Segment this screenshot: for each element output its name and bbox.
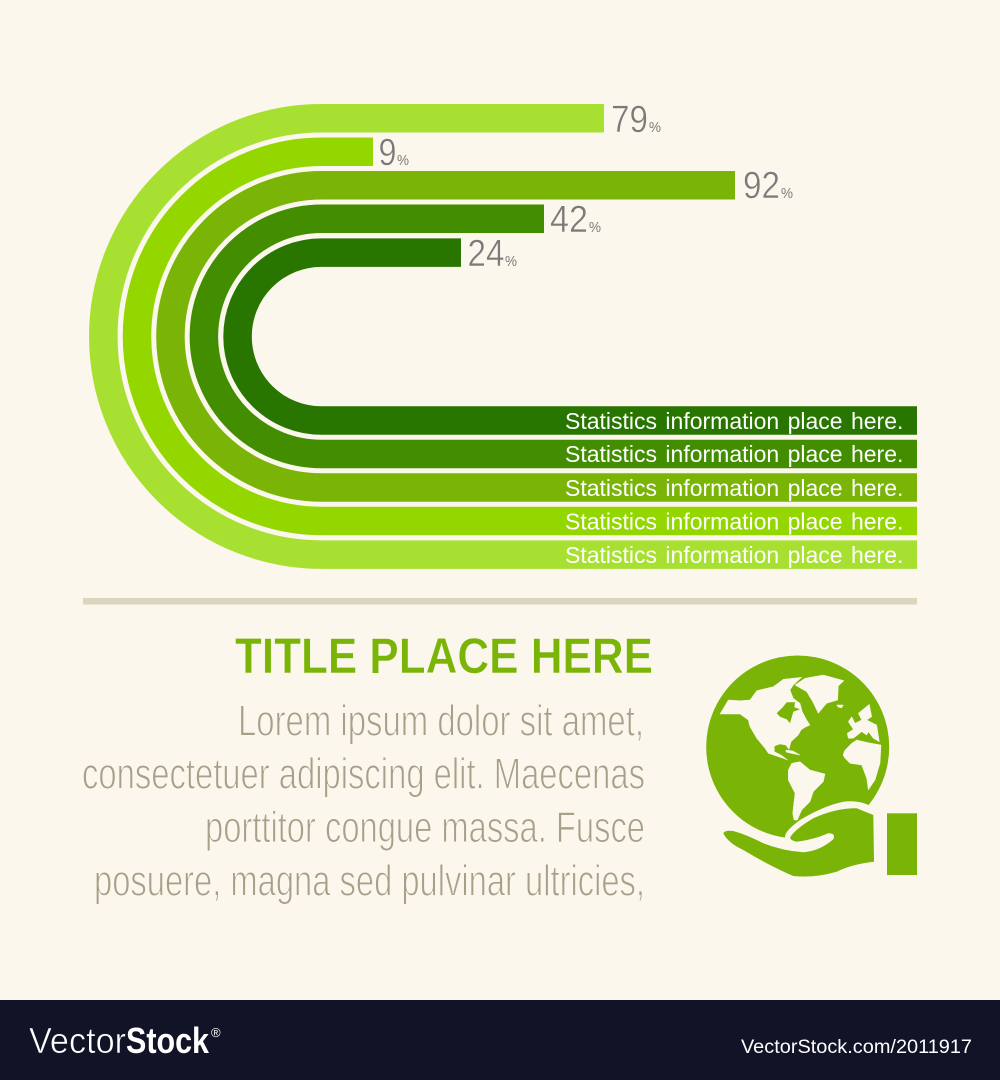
value 24%: % xyxy=(505,253,517,270)
footer id: VectorStock.com/2011917 xyxy=(741,1036,972,1058)
bar captions: Statistics information place here. xyxy=(565,408,903,434)
value 42%: 42 xyxy=(550,199,588,241)
body text xyxy=(82,697,645,906)
globe xyxy=(706,656,889,838)
value 79%: 79 xyxy=(611,99,648,141)
value 92%: % xyxy=(781,185,793,202)
chart: curved bars xyxy=(103,118,917,555)
footer logo xyxy=(29,1020,221,1061)
value 9% xyxy=(378,132,409,174)
icon: globe in hand xyxy=(706,656,917,880)
cuff xyxy=(887,813,917,875)
hand xyxy=(723,808,874,876)
percentage labels xyxy=(378,99,793,275)
title: TITLE PLACE HERE xyxy=(235,628,653,684)
value 9%: 9 xyxy=(378,132,396,174)
footer logo: Vector xyxy=(29,1020,126,1061)
band: 92% xyxy=(170,185,917,488)
value 24%: 24 xyxy=(468,233,504,275)
bar captions: Statistics information place here. xyxy=(565,441,903,467)
footer logo: Stock xyxy=(126,1020,210,1061)
value 79%: % xyxy=(649,119,661,136)
body text: porttitor congue massa. Fusce xyxy=(205,803,645,852)
value 92%: 92 xyxy=(743,165,780,207)
value 42%: % xyxy=(589,219,601,236)
footer logo: ® xyxy=(211,1025,221,1040)
band: 42% xyxy=(204,219,917,454)
band: 24% xyxy=(238,253,917,420)
body text: Lorem ipsum dolor sit amet, xyxy=(238,697,644,746)
value 9%: % xyxy=(397,152,409,169)
bar captions: Statistics information place here. xyxy=(565,475,903,501)
band: 9% xyxy=(137,152,917,521)
band: 79% xyxy=(103,118,917,555)
body text: posuere, magna sed pulvinar ultricies, xyxy=(94,856,645,906)
bar captions: Statistics information place here. xyxy=(565,508,903,534)
bar captions: Statistics information place here. xyxy=(565,542,903,568)
bar captions xyxy=(565,408,903,568)
footer bar xyxy=(0,1000,1000,1080)
body text: consectetuer adipiscing elit. Maecenas xyxy=(82,750,645,798)
